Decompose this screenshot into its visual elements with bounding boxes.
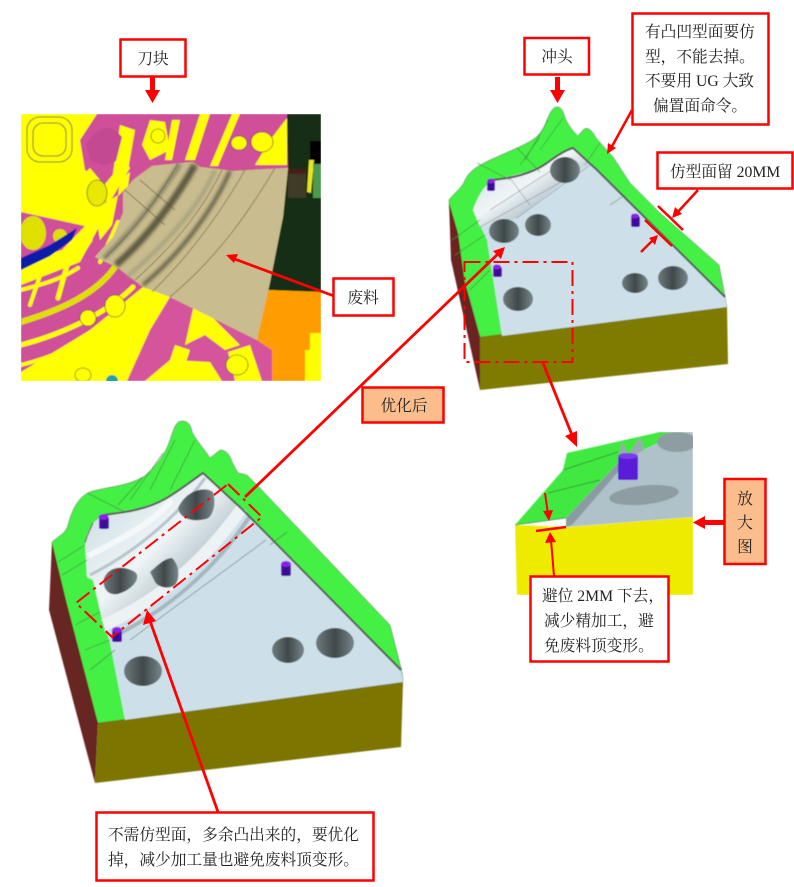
- label: punch: [524, 38, 589, 74]
- label: enlarged view with arrow: [693, 479, 766, 564]
- callout: keep contoured surface: 型，不能去掉。: [645, 48, 755, 66]
- label: die block: 刀块: [137, 50, 169, 68]
- callout: remove surplus surface: [96, 610, 374, 880]
- callout: remove surplus surface: 不需仿型面，多余凸出来的，要优化: [108, 826, 359, 844]
- dash-dot highlight: removed surface: [76, 484, 262, 637]
- label: enlarged view with arrow: 放: [737, 490, 753, 508]
- callout: 2mm clearance: 减少精加工，避: [544, 612, 654, 630]
- callout: remove surplus surface: 掉，减少加工量也避免废料顶变形。: [108, 850, 359, 869]
- rounded square mark: [27, 117, 72, 162]
- model: punch, top right: [449, 107, 728, 390]
- label: enlarged view with arrow: 大: [737, 514, 753, 532]
- label: optimised with leader arrow: [245, 247, 505, 497]
- label: punch: 冲头: [541, 48, 573, 66]
- curved bands lower left: [21, 222, 133, 365]
- model: enlarged view: [515, 432, 697, 595]
- callout: 20mm contour margin: 仿型面留 20MM: [670, 163, 780, 181]
- yellow streaks: [68, 114, 287, 381]
- label: scrap with arrow: [226, 254, 394, 316]
- label: optimised with leader arrow: 优化后: [380, 397, 428, 415]
- label: die block: [120, 40, 186, 76]
- label: enlarged view with arrow: 图: [737, 538, 753, 556]
- callout: 2mm clearance: 避位 2MM 下去，: [542, 587, 664, 605]
- callout: keep contoured surface: 不要用 UG 大致: [645, 72, 754, 90]
- callout: 20mm contour margin: [641, 152, 792, 252]
- callout: 2mm clearance: [530, 493, 668, 662]
- arrow: highlight to enlarged view: [543, 363, 577, 447]
- blue stripe: [21, 228, 77, 270]
- dash-dot highlight: enlarged region: [464, 262, 572, 362]
- callout: 2mm clearance: 免废料顶变形。: [544, 637, 654, 655]
- callout: keep contoured surface: [607, 14, 768, 154]
- image: die block top view: [20, 114, 321, 387]
- arrow: punch label to model: [550, 77, 565, 103]
- callout: keep contoured surface: 有凸凹型面要仿: [645, 23, 755, 41]
- dark background: [267, 114, 321, 292]
- callout: keep contoured surface: 偏置面命令。: [653, 97, 747, 115]
- scrap surface: [95, 162, 288, 340]
- model: optimised punch, bottom left: [49, 421, 403, 783]
- label: scrap with arrow: 废料: [347, 289, 379, 307]
- arrow: die block label to image: [145, 77, 160, 103]
